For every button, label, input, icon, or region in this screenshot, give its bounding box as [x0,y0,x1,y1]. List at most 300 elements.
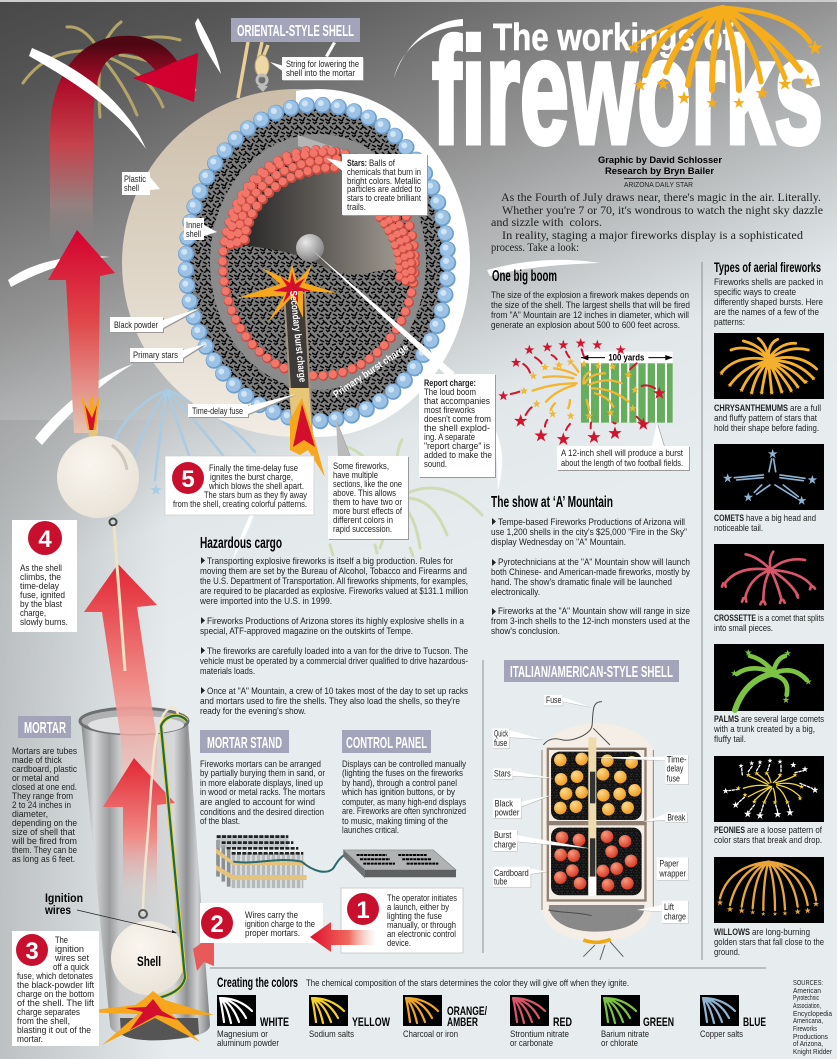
text: mortar description: made of thick [12,755,62,766]
heading: the show at A Mountain: The show at ‘A’ Mountain [491,494,613,511]
white outer rim [296,89,470,437]
swatch: green: GREEN [643,1015,674,1029]
caption: peonies: PEONIES [714,825,745,836]
callout: multiple sections: them to have two or [333,497,402,508]
callout: stars: Balls of [369,158,395,169]
step 1 box: an electronic control [387,929,456,940]
intro text: process. Take a look: [491,240,579,254]
arrow from box 2 to mortar [193,934,214,971]
callout: inner shell [184,218,217,240]
quick fuse [543,702,610,916]
label: fuse: Fuse [546,695,561,705]
step 5 box: 5 [181,466,195,493]
text: the show: show's conclusion. [491,626,560,637]
text: hazardous cargo: and mortars used to fire the shells. They also load the shells, so they're [200,696,460,707]
sources: of Arizona, [793,1039,823,1048]
step 2 box: 2 [210,911,224,938]
intro text: Whether you're 7 or 70, it's wondrous to watch the night sky dazzle [502,203,823,217]
text: types intro: patterns: [714,317,745,328]
heading: creating the colors: Creating the colors [217,974,298,990]
callout: string [270,57,363,80]
intro text: As the Fourth of July draws near, there's magic in the air. Literally. [501,190,821,204]
intro text: and sizzle with colors. [491,215,602,229]
callout: string: shell into the mortar [286,68,355,79]
text: control panel: (lighting the fuses on the fireworks [342,768,463,779]
step 4 box: 4 [38,526,52,553]
caption: chrysanthemums: CHRYSANTHEMUMS [714,403,788,414]
heading: control panel: CONTROL PANEL [346,735,427,752]
wires [233,855,344,872]
label: time-delay fuse: Time- [667,755,687,765]
label: ignition wires: Ignition [45,891,83,905]
callout: multiple sections: sections, like the one [333,479,402,490]
sources: Pyrotechnic [793,993,819,1002]
panel: willows [714,857,824,923]
swatch: orange/amber: Charcoal or iron [403,1029,458,1040]
caption: peonies: are a loose pattern of [747,825,822,836]
callout: report charge: added to make the [424,450,492,461]
text: hazardous cargo: ready for the evening's show. [200,706,306,717]
swatch: green: or chlorate [601,1038,638,1049]
dividers [210,262,766,968]
text: mortar description: depending on the [12,818,77,829]
callout: plastic shell [122,172,160,195]
swatch: yellow: Sodium salts [309,1029,354,1040]
middle rising arrow [48,230,115,433]
step 5 box: The stars burn as they fly away [204,490,307,501]
lift charge [549,905,644,932]
caption: comets: COMETS [714,513,744,524]
step 2 box: ignition charge to the [245,919,315,930]
caption: chrysanthemums: and fluffy pattern of stars that [714,413,817,424]
secondary burst tube [284,293,312,437]
heading: mortar stand: MORTAR STAND [207,735,282,752]
sources: Fireworks [793,1024,817,1033]
intro text [491,190,823,254]
label: shell: Shell [137,953,161,969]
step 4 box: time-delay [20,581,59,592]
callout: report charge: sound. [424,459,447,470]
panel: crossette [714,544,824,610]
Italian/American-style shell diagram [493,695,688,960]
yellow burst [533,365,628,410]
text: hazardous cargo: Fireworks Productions of Arizona stores its highly explosive shells in a [207,616,465,627]
black powder layer [186,105,448,421]
label: lift charge [637,901,688,923]
byline [598,155,722,189]
text: the show: both Chinese- and American-made fireworks, mostly by [491,567,690,578]
callout: 12-inch shell [557,423,689,470]
text: mortar description: diameter, [12,809,48,820]
step 4 box: fuse, ignited [20,590,65,601]
callout: stars: chemicals that burn in [347,167,421,178]
intro text: In reality, staging a major fireworks display is a sophisticated [502,228,803,242]
panel: peonies [714,756,824,822]
label: stars [493,768,553,779]
label: black powder: Black [495,799,513,809]
red stars [222,150,415,376]
text: one big boom: The size of the explosion a firework makes depends on [491,290,689,301]
caption: peonies [714,825,822,846]
text: hazardous cargo: the U.S. Department of Transportation. All fireworks shipments, for examples, [200,576,468,587]
step 3 box: off a quick [53,962,89,973]
label: ignition wires: wires [44,903,71,917]
step 3 box: The [55,935,68,946]
label: primary burst charge: Primary burst charge [332,342,411,400]
sources: American [793,986,821,995]
heading: mortar stand [200,730,289,753]
mortar rack illustration [216,835,344,887]
byline: Graphic by David Schlosser [598,155,722,166]
text: mortar description: them. They can be [12,845,77,856]
primary stars [184,103,448,421]
text: mortar description: They range from [12,791,73,802]
step 3 box: charge separates [17,1007,80,1018]
swatch: white: Magnesium or [217,1029,268,1040]
label: break [643,812,687,822]
step 4 box: As the shell [20,563,62,574]
caption: chrysanthemums [714,403,821,434]
callout: plastic shell: shell [124,183,139,194]
step 1 box: a launch, either by [387,902,449,913]
time-delay fuse segment [289,388,312,434]
caption: crossette [714,613,824,634]
time-delay fuse column [588,737,596,895]
text: mortar stand: of the blast. [200,816,240,827]
label: stars: Stars [494,769,511,779]
label: lift charge: charge [664,911,686,921]
gold stars [554,753,641,816]
swatch: green: Barium nitrate [601,1029,649,1040]
byline: Research by Bryn Bailer [605,166,714,177]
arrow from step 1 to step 2 [310,922,375,952]
text: hazardous cargo: The fireworks are carefully loaded into a van for the drive to Tucson. The [207,646,468,657]
text: mortar stand: by partially burying them in sand, or [200,768,325,779]
swatch: blue [700,995,766,1040]
step 1 box: lighting the fuse [387,911,442,922]
callout: 12-inch shell: about the length of two football fields. [561,458,683,469]
text: one big boom: from "A" Mountain are 12 inches in diameter, which will [491,310,689,321]
step 5 box [165,456,314,515]
step 2 box: proper mortars. [245,928,300,939]
callout: primary stars: Primary stars [133,350,178,361]
caption: willows: are long-burning [752,927,810,938]
step 3 box: mortar. [17,1034,43,1045]
report charge pointer [311,249,455,376]
callout: report charge: The loud boom [424,387,476,398]
caption: palms: fluffy tail. [714,734,746,745]
text: hazardous cargo: vehicle must be operated by a commercial driver qualified to drive hazardous- [200,656,468,667]
panel: comets [714,444,824,510]
label: ignition wires [44,891,177,933]
lower rising arrows [84,564,175,903]
swatch: white: WHITE [260,1015,289,1029]
label: paper wrapper: Paper [659,859,679,869]
caption: chrysanthemums: are a full [790,403,821,414]
label: quick fuse [493,728,543,748]
label: fuse [544,695,592,707]
red stars [554,830,637,891]
lower compartment [551,828,642,895]
pale blue firework behind shell [112,390,255,495]
text: mortar description: closed at one end. [12,782,77,793]
label: 100 yards: 100 yards [608,353,644,363]
heading: Italian/American-style shell: ITALIAN/AMERICAN-STYLE SHELL [510,664,673,681]
step 1 box [341,888,463,953]
text: control panel: by hand), through a control panel [342,778,457,789]
label: lift charge: Lift [664,902,674,912]
flame under shell [290,398,325,477]
text: types intro [714,277,823,328]
step 3 box: fuse, which detonates [17,971,93,982]
label: time-delay fuse [593,755,688,784]
burst star [237,264,337,322]
red curved arrow [50,36,198,245]
heading: Italian/American-style shell [504,660,679,682]
callout: report charge: the shell explod- [424,423,490,434]
step 3 box: from the shell, [17,1016,70,1027]
text: one big boom: the size of the shell. The largest shells that will be fired [491,300,690,311]
text: the show: Pyrotechnicians at the "A" Mountain show will launch [498,557,690,568]
step 3 box: wires set [54,953,89,964]
sources: Productions [793,1032,828,1041]
step 5 box: Finally the time-delay fuse [209,463,298,474]
sources: Association, [793,1001,821,1010]
caption: crossette: CROSSETTE [714,613,756,624]
label: paper wrapper: wrapper [658,869,686,879]
caption: willows [714,927,824,958]
heading: control panel [342,730,431,753]
label: time-delay fuse: delay [667,764,684,774]
sources: Encyclopedia [793,1009,833,1018]
callout: report charge: Report charge: [424,378,476,389]
text: mortar stand [200,759,325,827]
step 4 box: climbs, the [20,572,61,583]
caption: willows: WILLOWS [714,927,750,938]
heading: Oriental-style shell: ORIENTAL-STYLE SHELL [237,23,354,40]
caption: comets: have a big head and [746,513,816,524]
title: The workings of [493,17,733,59]
text: hazardous cargo: were imported into the U.S. in 1999. [199,596,332,607]
text: hazardous cargo: special, ATF-approved magazine on the outskirts of Tempe. [200,626,413,637]
text: mortar description: Mortars are tubes [12,746,77,757]
swatch: orange/amber: AMBER [447,1015,478,1029]
step 4 box: charge, [20,608,46,619]
text: hazardous cargo [199,556,468,717]
text: the show: display Wednesday on "A" Mountain. [491,537,626,548]
callout: primary stars [130,344,205,362]
callout: multiple sections [328,420,408,539]
swatch: red [510,995,572,1049]
callout: multiple sections: rapid succession. [333,524,392,535]
step 1 box: 1 [356,897,370,924]
label: cardboard tube: Cardboard [494,868,529,878]
text: mortar stand: in wood or metal racks. The mortars [200,787,325,798]
caption: comets: noticeable tail. [714,523,763,534]
callout: string: String for lowering the [286,59,359,70]
panel: palms [714,644,824,711]
shell inside mortar [111,707,185,995]
text: hazardous cargo: Transporting explosive fireworks is itself a big production. Rules for [207,556,453,567]
text: mortar description: 2 to 24 inches in [12,800,71,811]
step 3 box: charge on the bottom [17,989,94,1000]
callout: report charge [419,374,495,477]
football field [581,352,673,363]
swatch: orange/amber [403,995,487,1040]
plastic shell back [122,89,470,437]
callout: multiple sections: different colors in [333,515,393,526]
step 2 box: Wires carry the [245,910,298,921]
callout: time-delay fuse [188,394,296,417]
callout: stars: Stars: [347,158,367,169]
sources: Americana, [793,1016,823,1025]
callout: report charge: ing. A separate [424,432,475,443]
caption: palms: with a trunk created by a big, [713,724,815,735]
swatch: red: Strontium nitrate [510,1029,569,1040]
white swooshes [8,18,600,562]
swatch: blue: Copper salts [700,1029,743,1040]
callout: stars: particles are added to [347,184,421,195]
text: the show: Fireworks at the "A" Mountain show will range in size [498,606,690,617]
text: one big boom [491,290,690,331]
step 1 box: The operator initiates [387,893,457,904]
label: cardboard tube: tube [494,877,507,887]
step 4 box: by the blast [20,599,62,610]
callout: multiple sections: above. This allows [333,488,396,499]
text: colors intro: The chemical composition of the stars determines the color they will give off when they ignite. [306,978,629,989]
step 3 box: blasting it out of the [17,1025,91,1036]
step 5 box: ignites the burst charge, [210,472,293,483]
paper wrapper [542,723,653,942]
text: mortar description: size of shell that [12,827,75,838]
text: the show: hand. The show's dramatic finale will be launched [491,577,672,588]
heading: mortar [18,716,71,738]
callout: multiple sections: Some fireworks, [333,461,389,472]
caption: palms [713,714,824,745]
label: quick fuse: fuse [494,738,507,748]
empty cavity [240,165,401,274]
caption: comets [714,513,816,534]
inner shell [210,134,426,390]
text: types intro: specific ways to create [714,287,796,298]
text: the show: Tempe-based Fireworks Productions of Arizona will [498,517,685,528]
callout: time-delay fuse: Time-delay fuse [192,406,243,417]
byline: ARIZONA DAILY STAR [624,182,693,189]
label: paper wrapper [657,857,688,880]
callout: black powder: Black powder [114,320,158,331]
swatch: red: or carbonate [510,1038,553,1049]
cardboard frame [547,748,647,902]
text: control panel: are. Fireworks are often synchronized [342,806,466,817]
text: mortar stand: are angled to account for wind [200,797,315,808]
text: mortar description: as long as 6 feet. [12,854,75,865]
football field burst diagram [498,338,673,445]
text: control panel: computer, as many high-end displays [342,797,466,808]
text: control panel: Displays can be controlled manually [342,759,466,770]
callout: inner shell: Inner [186,220,203,231]
swatch: yellow [309,995,390,1040]
label: burst charge: charge [494,840,516,850]
text: mortar description: or metal and [12,773,59,784]
text: mortar description: will be fired from [11,836,77,847]
pale green firework behind shell [330,440,482,556]
heading: one big boom: One big boom [492,268,557,285]
text: control panel: to music, making timing of the [342,816,448,827]
label: black powder: powder [495,808,519,818]
heading: mortar: MORTAR [24,720,66,737]
callout: report charge: "report charge" is [424,441,490,452]
swatch: blue: BLUE [743,1015,766,1029]
label: cardboard tube [493,867,547,887]
red outer burst [511,349,655,430]
caption: willows: ground. [714,947,740,958]
caption: palms: PALMS [714,714,739,725]
swatch: orange/amber: ORANGE/ [447,1004,487,1018]
step 4 box [12,520,77,632]
step 3 box: ignition [55,944,84,955]
step 3 box: of the shell. The lift [17,998,94,1009]
callout: plastic shell: Plastic [124,174,146,185]
step 2 box [200,903,323,943]
step 1 box: manually, or through [387,920,456,931]
rising shell with flame [57,392,139,526]
callout: black powder [110,308,200,332]
heading: Oriental-style shell [231,18,360,42]
label: burst charge: Burst [494,830,512,840]
callout: 12-inch shell: A 12-inch shell will produce a burst [561,448,683,459]
text: control panel: launches critical. [342,825,399,836]
step 1 box: device. [387,938,411,949]
text: the show: electronically. [491,587,540,598]
ignition wires [153,716,187,999]
swatch: yellow: YELLOW [352,1015,390,1029]
swatch: white: aluminum powder [217,1038,279,1049]
blast star in mortar [77,991,214,1045]
sources: SOURCES: [793,978,823,987]
swatch: red: RED [553,1015,572,1029]
callout: report charge: that accompanies [424,396,490,407]
callout: inner shell: shell [186,229,201,240]
heading: hazardous cargo: Hazardous cargo [200,535,282,552]
text: mortar stand: in more elaborate displays, lined up [200,778,323,789]
text: the show: use 1,200 shells in the city's $25,000 "Fire in the Sky" [491,527,687,538]
label: secondary burst charge: Secondary burst charge [287,290,308,383]
swatch: green [601,995,674,1049]
text: the show: from 3-inch shells to the 12-inch monsters used at the [491,616,690,627]
label: quick fuse: Quick [494,729,508,739]
callout: stars [326,154,427,215]
string and ring [238,42,269,98]
callout: report charge: most fireworks [424,405,475,416]
text: mortar stand: Fireworks mortars can be arranged [200,759,321,770]
text: hazardous cargo: materials loads. [200,666,255,677]
text: hazardous cargo: moving them are set by the Bureau of Alcohol, Tobacco and Firearms and [200,566,467,577]
step 5 box: from the shell, creating colorful patterns. [173,499,307,510]
pale gold firework, upper left [23,22,195,117]
text: mortar description [11,746,77,865]
sources [793,978,833,1056]
text: mortar stand: conditions and the desired direction [200,807,324,818]
step 4 box: slowly burns. [20,617,68,628]
label: time-delay fuse: fuse [667,773,680,783]
panel: chrysanthemums [714,333,824,399]
text: control panel [341,759,466,836]
step 3 box: the black-powder lift [17,980,94,991]
text: hazardous cargo: Once at "A" Mountain, a crew of 10 takes most of the day to set up racks [207,686,468,697]
callout: stars: stars to create brilliant [347,193,421,204]
control panel illustration [343,850,456,878]
fuse string in flight [114,526,125,671]
